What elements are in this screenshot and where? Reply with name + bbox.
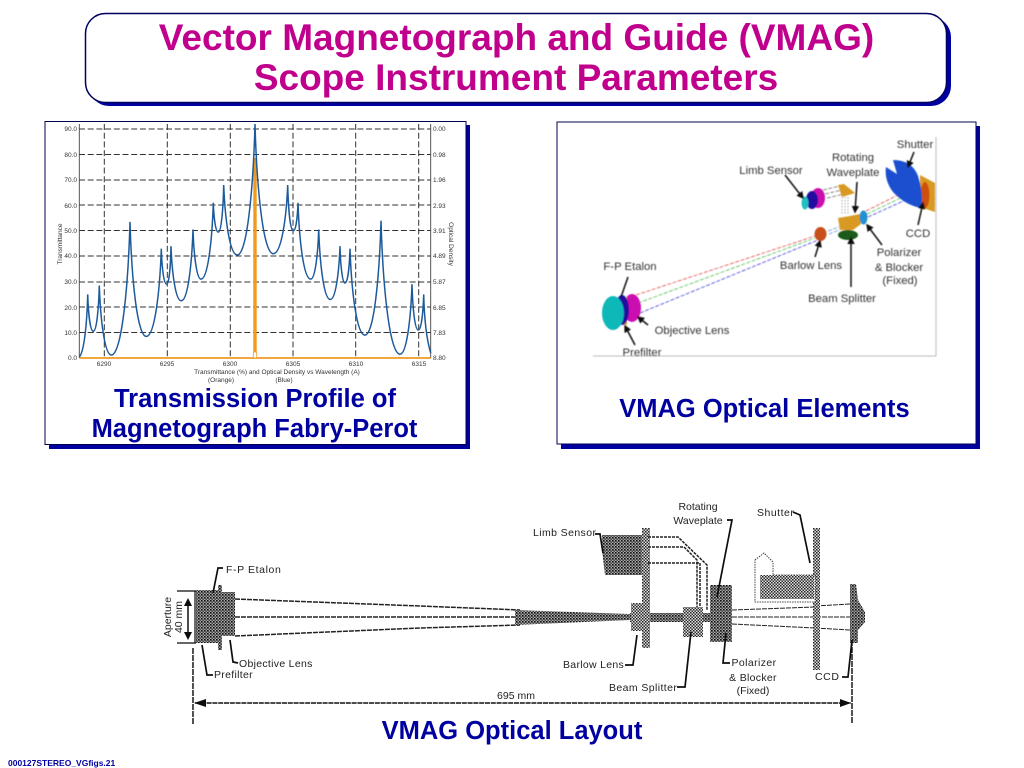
pointer arrows [621,152,923,345]
caption: optical elements: VMAG Optical Elements [619,395,910,423]
layout labels: & Blocker [729,672,777,684]
optical labels: (Fixed) [882,275,918,287]
orange transmittance trace [79,158,431,358]
chart axis labels: Optical Density [447,222,454,267]
overall length dimension [193,640,852,724]
chart axis labels: 6315 [412,361,427,368]
footer reference: 000127STEREO_VGfigs.21 [8,758,116,768]
optical labels [603,139,933,359]
leaders and arrows [202,512,852,687]
chart axis labels: 10.0 [64,330,77,337]
chart axis labels: 7.83 [433,330,446,337]
waveplate and polarizer block [710,585,732,642]
waveplate and splitter parts [814,184,868,241]
line chart: transmittance vs wavelength [57,124,454,384]
diagram: optical layout [162,501,865,724]
caption: transmission profile: Magnetograph Fabry-Perot [92,415,418,443]
shutter assembly [755,528,820,670]
blue optical density trace [79,124,431,357]
shutter and CCD [886,160,935,212]
chart axis labels: 4.89 [433,253,446,260]
layout labels: Waveplate [673,515,723,527]
optical labels: Prefilter [623,347,662,359]
chart axis labels: (Orange) [208,377,234,384]
chart axis labels: 1.96 [433,177,446,184]
layout labels: Rotating [678,501,718,513]
chart axis labels: 0.98 [433,152,446,159]
layout labels: Prefilter [214,669,253,681]
chart axis labels: 6300 [223,361,238,368]
chart axis labels: 90.0 [64,126,77,133]
caption: transmission profile: Transmission Profile of [114,385,396,413]
layout labels: F-P Etalon [226,564,281,576]
optical labels: Objective Lens [655,325,730,337]
beam path [235,599,850,636]
optical labels: Beam Splitter [808,293,876,305]
chart axis labels: 6.85 [433,305,446,312]
objective assembly [602,294,641,330]
limb sensor block [602,535,643,575]
chart axis labels: 6305 [286,361,301,368]
layout labels: Limb Sensor [533,527,596,539]
relay structure [631,528,707,648]
aperture dimension: Aperture [162,597,174,637]
layout labels: Barlow Lens [563,659,624,671]
chart axis labels: 6310 [349,361,364,368]
chart axis labels: 6295 [160,361,175,368]
chart axis labels: 3.91 [433,228,446,235]
chart axis labels: (Blue) [275,377,293,384]
optical labels: Barlow Lens [780,260,842,272]
entrance optics [196,585,235,650]
optical labels: Waveplate [827,167,879,179]
panel: optical elements [557,122,980,449]
chart axis labels: 40.0 [64,253,77,260]
title box [86,14,951,106]
chart axis labels: 60.0 [64,203,77,210]
limb sensor assembly [802,188,825,210]
layout labels: Polarizer [731,657,777,669]
chart axis labels [57,126,454,384]
diagram: 3D optical elements [593,137,936,359]
chart axis labels: Transmittance (%) and Optical Density vs Wavelength (A) [194,369,360,376]
optical labels: F-P Etalon [603,261,657,273]
chart axis labels: 0.00 [433,126,446,133]
optical labels: Shutter [897,139,933,151]
chart axis labels: 50.0 [64,228,77,235]
chart axis labels: 5.87 [433,279,446,286]
optical labels: & Blocker [875,262,923,274]
title text: Scope Instrument Parameters [254,57,778,98]
layout labels: Beam Splitter [609,682,677,694]
chart axis labels: 30.0 [64,279,77,286]
optical labels: CCD [906,228,930,240]
chart axis labels: 8.80 [433,355,446,362]
chart axis labels: 6290 [97,361,112,368]
optical labels: Limb Sensor [739,165,803,177]
chart axis labels: Transmittance [57,223,64,264]
chart axis labels: 0.0 [68,355,77,362]
aperture dimension [162,591,196,643]
chart axis labels: 80.0 [64,152,77,159]
CCD block [850,584,865,643]
aperture dimension: 40 mm [173,601,185,633]
layout labels: Objective Lens [239,658,313,670]
optical labels: Polarizer [877,247,922,259]
optical labels: Rotating [832,152,874,164]
panel: transmission profile [45,122,470,449]
title text: Vector Magnetograph and Guide (VMAG) [159,17,874,58]
layout labels: (Fixed) [737,685,769,697]
layout labels: CCD [815,671,840,683]
light beams [636,186,910,313]
chart axis labels: 20.0 [64,305,77,312]
chart axis labels: 2.93 [433,203,446,210]
chart axis labels: 70.0 [64,177,77,184]
layout labels: Shutter [757,507,794,519]
layout labels [214,501,840,697]
overall length dimension: 695 mm [497,690,535,702]
caption: optical layout: VMAG Optical Layout [382,717,643,745]
